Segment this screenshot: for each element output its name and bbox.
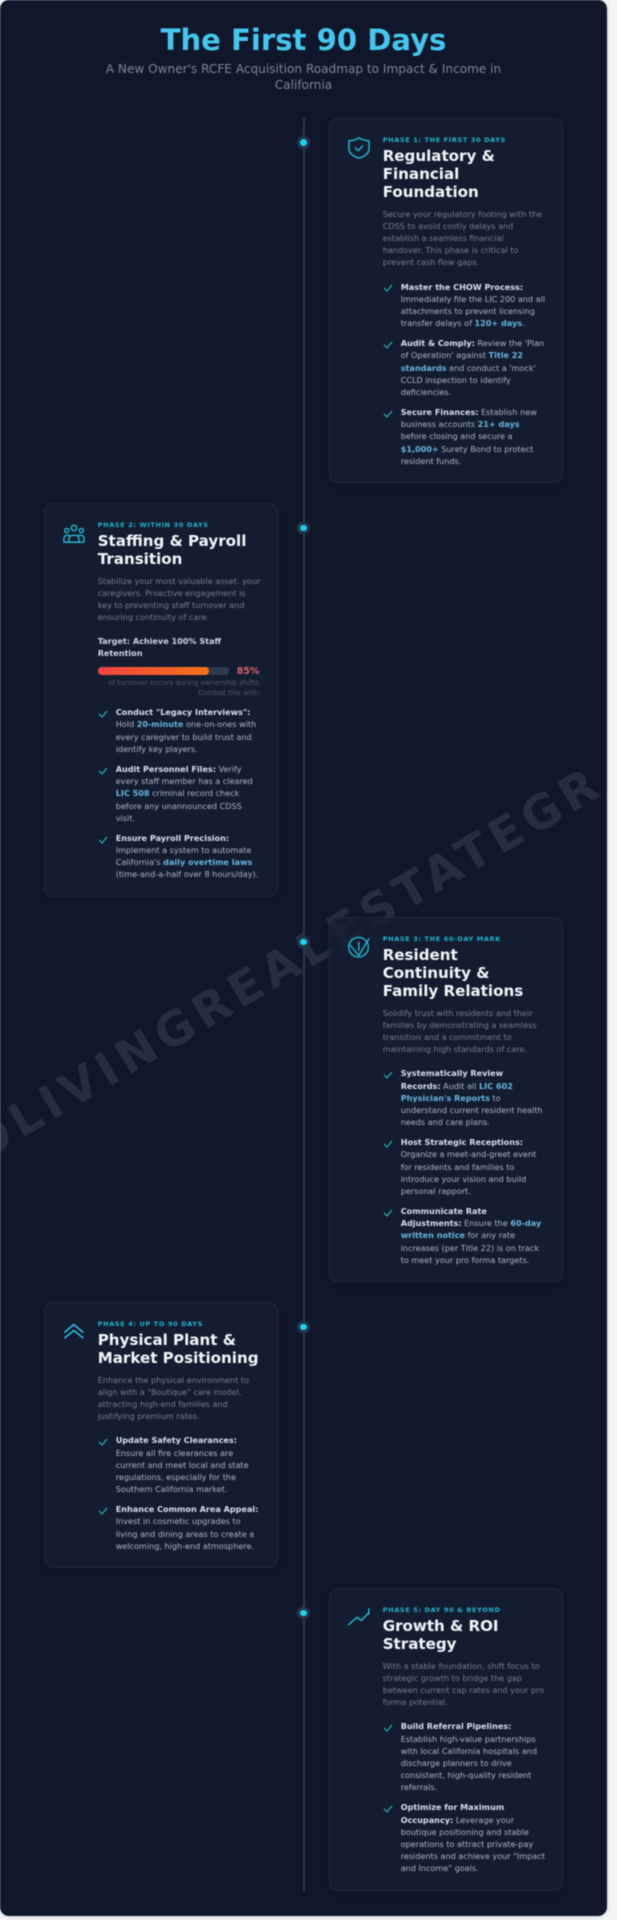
list item: for residents and families to: [401, 1162, 514, 1172]
checklist: [383, 1721, 546, 1874]
list item: consistent, high-quality resident: [401, 1770, 531, 1780]
description: [98, 576, 261, 622]
list item: before any unannounced CDSS: [116, 801, 242, 811]
list item: [98, 1435, 249, 1494]
list item: and Income" goals.: [401, 1863, 479, 1873]
timeline line: [302, 118, 304, 1891]
description: caregivers. Proactive engagement is: [98, 588, 246, 598]
list item: Update Safety Clearances:: [116, 1435, 237, 1445]
list item: Audit & Comply: Review the 'Plan: [401, 338, 544, 348]
list item: written notice for any rate: [401, 1230, 515, 1240]
description: transition and a commitment to: [383, 1032, 512, 1042]
title: The First 90 Days: [161, 23, 446, 57]
heading: Regulatory &: [383, 147, 495, 165]
list item: Ensure Payroll Precision:: [116, 833, 229, 843]
list item: standards and conduct a 'mock': [401, 363, 536, 373]
list item: Implement a system to automate: [116, 845, 251, 855]
percentage: 85%: [237, 666, 259, 677]
list item: of Operation' against Title 22: [401, 350, 523, 360]
heading: [98, 1331, 258, 1367]
phase 5 content: [382, 1606, 546, 1874]
list item: every caregiver to build trust and: [116, 732, 252, 742]
description: [97, 1375, 249, 1421]
description: families by demonstrating a seamless: [383, 1020, 537, 1030]
list item: referrals.: [401, 1782, 437, 1792]
phase 3 content: [382, 935, 543, 1266]
list item: [383, 1206, 542, 1266]
list item: to meet your pro forma targets.: [401, 1255, 529, 1265]
phase label: PHASE 5: DAY 90 & BEYOND: [383, 1606, 501, 1614]
list item: business accounts 21+ days: [401, 419, 520, 429]
list item: California's daily overtime laws: [116, 857, 252, 867]
list item: visit.: [116, 813, 135, 823]
list item: [383, 407, 537, 466]
list item: [98, 764, 253, 823]
heading: [97, 532, 246, 568]
description: prevent cash flow gaps.: [383, 257, 479, 267]
checklist: [98, 707, 258, 879]
list item: Conduct "Legacy Interviews":: [116, 707, 250, 717]
heading: Continuity &: [383, 964, 489, 982]
heading: Financial: [383, 165, 459, 183]
list item: CCLD inspection to identify: [401, 375, 511, 385]
phase 4 content: [97, 1320, 258, 1552]
list item: [383, 282, 546, 328]
list item: attachments to prevent licensing: [401, 306, 535, 316]
timeline dot: phase 2: [300, 525, 307, 531]
list item: [383, 1720, 563, 1793]
target label: Target: Achieve 100% Staff: [98, 636, 221, 646]
description: maintaining high standards of care.: [383, 1044, 527, 1054]
list item: Build Referral Pipelines:: [401, 1721, 511, 1731]
bar track: [98, 667, 229, 675]
icon: double chevron up: [63, 1323, 84, 1340]
checklist: [383, 1068, 543, 1266]
list item: operations to attract private-pay: [401, 1839, 533, 1849]
checklist: [383, 282, 546, 466]
description: justifying premium rates.: [98, 1411, 200, 1421]
list item: increases (per Title 22) is on track: [401, 1243, 539, 1253]
list item: Optimize for Maximum: [401, 1802, 504, 1812]
description: Secure your regulatory footing with the: [383, 209, 542, 219]
heading: Resident: [383, 946, 458, 964]
heading: Growth & ROI: [383, 1617, 499, 1635]
phase label: PHASE 3: THE 60-DAY MARK: [383, 935, 501, 943]
list item: residents and achieve your "Impact: [401, 1851, 545, 1861]
icon: shield check: [347, 136, 371, 160]
list item: [383, 1068, 543, 1127]
phase label: PHASE 4: UP TO 90 DAYS: [98, 1320, 203, 1328]
checklist: [98, 1435, 258, 1552]
list item: Establish high-value partnerships: [401, 1734, 536, 1744]
heading: [382, 1617, 499, 1653]
subtitle: California: [275, 78, 332, 92]
phase 1 content: [382, 136, 546, 466]
phase label: PHASE 2: WITHIN 30 DAYS: [98, 521, 209, 529]
list item: $1,000+ Surety Bond to protect: [401, 444, 533, 454]
heading: Physical Plant &: [98, 1331, 236, 1349]
heading: Foundation: [383, 183, 479, 201]
list item: Occupancy: Leverage your: [401, 1815, 514, 1825]
list item: Adjustments: Ensure the 60-day: [401, 1218, 541, 1228]
list item: identify key players.: [116, 744, 198, 754]
description: CDSS to avoid costly delays and: [383, 221, 513, 231]
target label: [97, 636, 222, 658]
description: Enhance the physical environment to: [98, 1375, 249, 1385]
list item: (time-and-a-half over 8 hours/day).: [116, 869, 258, 879]
panel: phase 3: [329, 917, 563, 1282]
list item: Host Strategic Receptions:: [401, 1137, 523, 1147]
panel: phase 1: [329, 118, 563, 483]
description: Stabilize your most valuable asset: your: [98, 576, 260, 586]
bar fill: [98, 667, 209, 675]
list item: regulations, especially for the: [116, 1472, 236, 1482]
phase 2 content: [97, 521, 261, 879]
description: between current cap rates and your pro: [383, 1685, 544, 1695]
bar note: Combat this with:: [198, 688, 261, 697]
list item: [98, 1504, 258, 1552]
list item: Enhance Common Area Appeal:: [116, 1504, 258, 1514]
icon: trending up: [347, 1608, 370, 1626]
list item: [383, 1801, 563, 1874]
list item: Ensure all fire clearances are: [116, 1448, 233, 1458]
heading: [383, 147, 495, 201]
heading: Market Positioning: [98, 1349, 258, 1367]
description: [382, 1661, 544, 1707]
list item: living and dining areas to create a: [116, 1529, 254, 1539]
heading: Strategy: [383, 1635, 456, 1653]
list item: understand current resident health: [401, 1105, 543, 1115]
description: [382, 1008, 537, 1054]
list item: current and meet local and state: [116, 1460, 249, 1470]
list item: Records: Audit all LIC 602: [401, 1081, 513, 1091]
description: strategic growth to bridge the gap: [383, 1673, 522, 1683]
progress bar: [97, 666, 260, 677]
panel: phase 2: [44, 503, 278, 897]
description: With a stable foundation, shift focus to: [383, 1661, 540, 1671]
heading: [382, 946, 524, 1000]
list item: Systematically Review: [401, 1068, 503, 1078]
list item: [98, 833, 258, 879]
description: handover. This phase is critical to: [383, 245, 518, 255]
list item: deficiencies.: [401, 387, 451, 397]
list item: LIC 508 criminal record check: [116, 788, 239, 798]
list item: Invest in cosmetic upgrades to: [116, 1516, 241, 1526]
description: [382, 209, 542, 267]
description: Solidify trust with residents and their: [383, 1008, 533, 1018]
list item: introduce your vision and build: [401, 1174, 526, 1184]
list item: resident funds.: [401, 456, 461, 466]
list item: before closing and secure a: [401, 431, 513, 441]
list item: discharge planners to drive: [401, 1758, 512, 1768]
panel: phase 4: [44, 1302, 278, 1568]
list item: personal rapport.: [401, 1186, 471, 1196]
icon: people group: [62, 524, 86, 544]
list item: [383, 338, 544, 397]
timeline dot: phase 1: [300, 139, 307, 146]
list item: Communicate Rate: [401, 1206, 487, 1216]
timeline dot: phase 4: [300, 1324, 307, 1330]
phase label: PHASE 1: THE FIRST 30 DAYS: [383, 136, 506, 144]
list item: welcoming, high-end atmosphere.: [116, 1541, 254, 1551]
bar note: [108, 678, 261, 697]
target label: Retention: [98, 648, 142, 658]
list item: [98, 707, 256, 754]
subtitle: [106, 62, 501, 92]
list item: Audit Personnel Files: Verify: [116, 764, 242, 774]
description: key to preventing staff turnover and: [98, 600, 245, 610]
heading: Staffing & Payroll: [98, 532, 246, 550]
description: ensuring continuity of care.: [98, 612, 209, 622]
list item: transfer delays of 120+ days.: [401, 318, 525, 328]
timeline dot: phase 5: [300, 1610, 307, 1616]
bar note: of turnover occurs during ownership shifts.: [108, 678, 261, 687]
list item: Immediately file the LIC 200 and all: [401, 294, 545, 304]
list item: needs and care plans.: [401, 1117, 490, 1127]
heading: Transition: [98, 550, 182, 568]
list item: Hold 20-minute one-on-ones with: [116, 719, 256, 729]
panel: phase 5: [329, 1588, 563, 1891]
list item: every staff member has a cleared: [116, 776, 253, 786]
list item: Physician's Reports to: [401, 1093, 501, 1103]
description: forma potential.: [383, 1697, 448, 1707]
list item: [383, 1137, 536, 1196]
icon: circle check: [347, 936, 370, 958]
description: align with a "Boutique" care model,: [98, 1387, 241, 1397]
subtitle: A New Owner's RCFE Acquisition Roadmap to Impact & Income in: [106, 62, 501, 76]
list item: boutique positioning and stable: [401, 1827, 529, 1837]
description: establish a seamless financial: [383, 233, 504, 243]
description: attracting high-end families and: [98, 1399, 228, 1409]
list item: Master the CHOW Process:: [401, 282, 523, 292]
list item: Organize a meet-and-greet event: [401, 1149, 536, 1159]
timeline dot: phase 3: [300, 939, 307, 945]
list item: with local California hospitals and: [401, 1746, 537, 1756]
list item: Secure Finances: Establish new: [401, 407, 537, 417]
heading: Family Relations: [383, 982, 523, 1000]
list item: Southern California market.: [116, 1484, 227, 1494]
